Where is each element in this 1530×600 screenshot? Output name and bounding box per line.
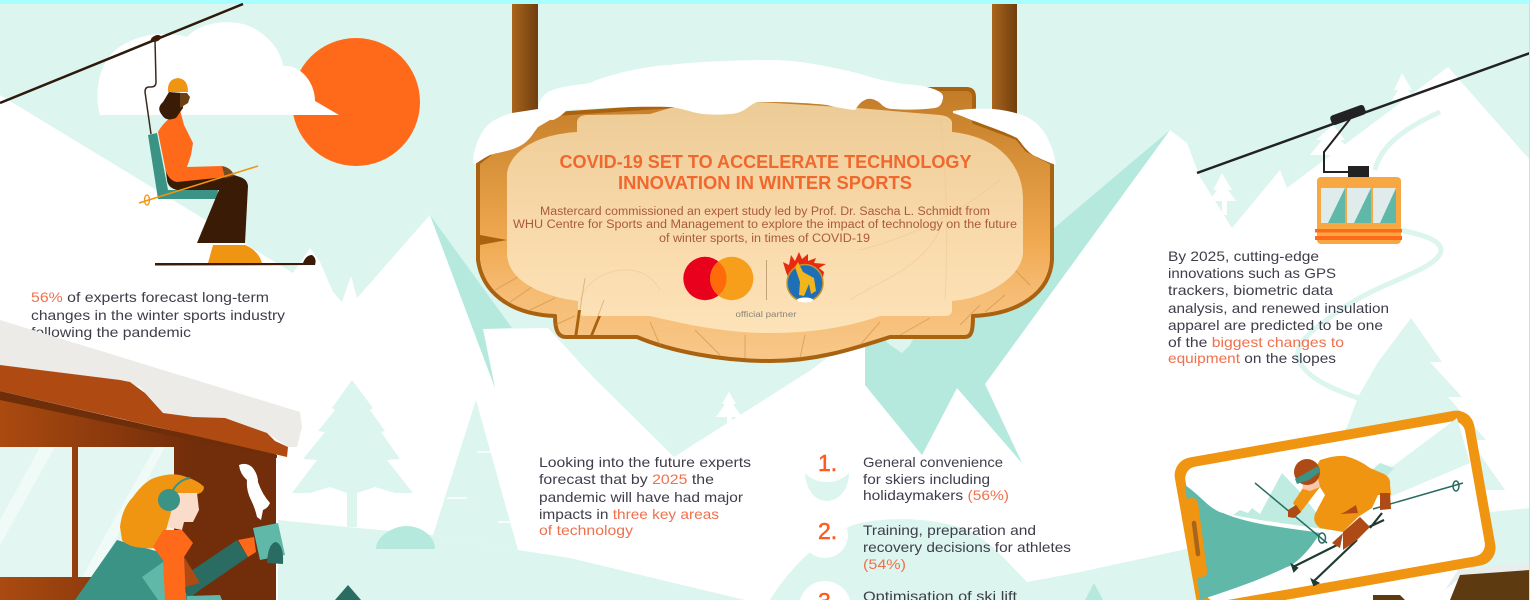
mug handle (267, 542, 283, 564)
sign description (513, 206, 1017, 245)
list item 1: for skiers including (863, 471, 990, 487)
window right (78, 447, 174, 577)
pole right (1373, 483, 1463, 509)
list item 3 (818, 588, 1017, 600)
screen background mint (1385, 418, 1470, 497)
official partner: official partner (736, 310, 797, 319)
gondola clamp (1329, 104, 1367, 126)
small tree tip (1085, 583, 1103, 600)
brown ground bottom right (1373, 570, 1530, 600)
wooden sign (478, 89, 1052, 361)
boot (208, 245, 262, 263)
sun (292, 38, 420, 166)
hair (159, 92, 183, 119)
left text: 56% forecast (31, 289, 285, 340)
snow left (473, 109, 550, 164)
number circles (799, 512, 851, 600)
background tree right (1300, 318, 1505, 490)
earmuff (158, 489, 180, 511)
arm (185, 540, 248, 600)
gondola stripes (1315, 229, 1402, 240)
face (1302, 478, 1320, 491)
cabin roof (0, 365, 288, 457)
list item 2: (54%) (863, 556, 906, 572)
background tree left (292, 380, 413, 527)
gondola body (1317, 177, 1401, 244)
right text: equipment: of the biggest changes to (1168, 334, 1344, 350)
window left (0, 447, 72, 577)
goggles (1295, 466, 1320, 484)
right text: equipment (1168, 248, 1389, 366)
trousers (165, 165, 248, 243)
dark tree tip (335, 585, 361, 600)
gondola hanger (1324, 119, 1350, 172)
right edge line (1529, 4, 1530, 600)
ski tips (1292, 565, 1318, 585)
right text: equipment: trackers, biometric data (1168, 282, 1333, 298)
list item 1: holidaymakers (56%) (863, 487, 1009, 503)
snowy ground left (278, 520, 745, 600)
window glare (0, 447, 165, 577)
logo divider (766, 260, 767, 300)
face (180, 93, 190, 108)
gondola (1315, 104, 1402, 244)
mug (253, 523, 285, 560)
centre text: three key areas: pandemic will have had major (539, 489, 743, 505)
centre text: three key areas: Looking into the future experts (539, 454, 751, 470)
right cable (1197, 53, 1530, 173)
small white trees on the ridges (716, 73, 1416, 428)
skier suit (1293, 456, 1391, 532)
right text: equipment: analysis, and renewed insulation (1168, 300, 1389, 316)
knee highlight (187, 595, 222, 600)
top bar (0, 0, 1530, 4)
glove (238, 537, 256, 557)
gloves (1288, 493, 1391, 518)
centre text: three key areas: impacts in three key areas (539, 506, 719, 522)
sign title (560, 152, 972, 193)
wood grain (495, 270, 1030, 358)
partner crest (783, 252, 826, 302)
conifer notches (447, 452, 512, 522)
hair (120, 474, 204, 548)
left text: 56% forecast: 56% of experts forecast long-term (31, 289, 269, 305)
sign notch (480, 235, 507, 245)
left text: 56% forecast: following the pandemic (31, 324, 191, 340)
headband (172, 478, 190, 492)
lift hanger (145, 40, 156, 134)
scarf (153, 530, 193, 600)
suit shadow (1340, 505, 1358, 514)
gondola windows (1321, 188, 1396, 223)
mound (376, 526, 435, 549)
conifer behind text (433, 400, 518, 550)
cabin (0, 320, 302, 600)
sign slits (574, 310, 601, 338)
cloud (97, 22, 339, 115)
pole ring (144, 195, 150, 205)
coat lapel (142, 562, 168, 600)
snow above brown ground (1445, 562, 1530, 590)
sign posts (512, 4, 1017, 116)
list item 2: Training, preparation and (863, 522, 1036, 538)
list item 1: 1. (818, 450, 837, 476)
pole left (1255, 483, 1327, 543)
left text: 56% forecast: changes in the winter sports industry (31, 307, 285, 323)
phone button slot (1194, 523, 1198, 554)
chair (148, 133, 218, 199)
list item 2 (818, 518, 1071, 572)
face (167, 493, 199, 530)
skis (1293, 513, 1384, 582)
hat (168, 78, 188, 92)
glove (222, 166, 234, 178)
snow right (953, 109, 1056, 165)
sign title: INNOVATION IN WINTER SPORTS (618, 173, 912, 193)
left chairlift cable (0, 4, 243, 103)
sign wood with outline (478, 89, 1052, 361)
ski (155, 255, 316, 266)
panel grain (580, 118, 1000, 300)
list item 1 (818, 450, 1009, 503)
mountain shadow: centre right (865, 130, 1170, 463)
mountain shadow: left (430, 215, 512, 388)
slit lines (580, 278, 604, 316)
crest snow (797, 298, 813, 302)
right text: equipment: equipment on the slopes (1168, 350, 1336, 366)
lift clamp (150, 34, 162, 43)
phone frame (1172, 408, 1498, 600)
right text: equipment: innovations such as GPS (1168, 265, 1336, 281)
left chairlift with skier (139, 34, 316, 266)
ski trail (1298, 112, 1441, 400)
smartphone with skier (1172, 408, 1498, 600)
sign description: of winter sports, in times of COVID-19 (659, 233, 870, 245)
centre text: three key areas (539, 454, 751, 538)
right text: equipment: By 2025, cutting-edge (1168, 248, 1319, 264)
jacket (158, 110, 226, 182)
list item 2: 2. (818, 518, 837, 544)
inner panel (507, 102, 1023, 333)
boots (1332, 517, 1370, 550)
roof shadow (0, 391, 277, 458)
ski pole (139, 166, 258, 203)
list item 1: General convenience (863, 454, 1003, 470)
sign description: WHU Centre for Sports and Management to explore the impact of technology on the future (513, 219, 1017, 231)
Mastercard logo (683, 257, 753, 300)
teal slope (1185, 485, 1320, 600)
distant peaks (1233, 463, 1394, 530)
pole ring left (1318, 533, 1326, 543)
rolling hill (770, 519, 1205, 600)
pole ring right (1453, 481, 1459, 491)
crest animal (795, 262, 816, 296)
snow on top (538, 60, 943, 120)
centre text: three key areas: of technology (539, 522, 633, 538)
right text: equipment: apparel are predicted to be one (1168, 317, 1383, 333)
list item 2: recovery decisions for athletes (863, 539, 1071, 555)
crest badge (787, 264, 823, 302)
sign title: COVID-19 SET TO ACCELERATE TECHNOLOGY (560, 152, 972, 172)
cabin wall (0, 395, 276, 600)
woman with mug (75, 464, 285, 600)
sign snow (473, 60, 1056, 165)
steam (239, 464, 270, 520)
phone side button (1186, 498, 1207, 578)
coat (75, 540, 190, 600)
scarf shadow (183, 555, 200, 587)
sign description: Mastercard commissioned an expert study led by Prof. Dr. Sascha L. Schmidt from (540, 206, 990, 218)
helmet (1294, 459, 1320, 485)
crest flames (783, 252, 826, 282)
gondola top box (1348, 166, 1369, 178)
ground right (1080, 545, 1205, 600)
cabin snow (0, 320, 302, 447)
ground far right (1470, 508, 1530, 600)
centre text: three key areas: forecast that by 2025 the (539, 471, 714, 487)
crescent (805, 473, 849, 501)
